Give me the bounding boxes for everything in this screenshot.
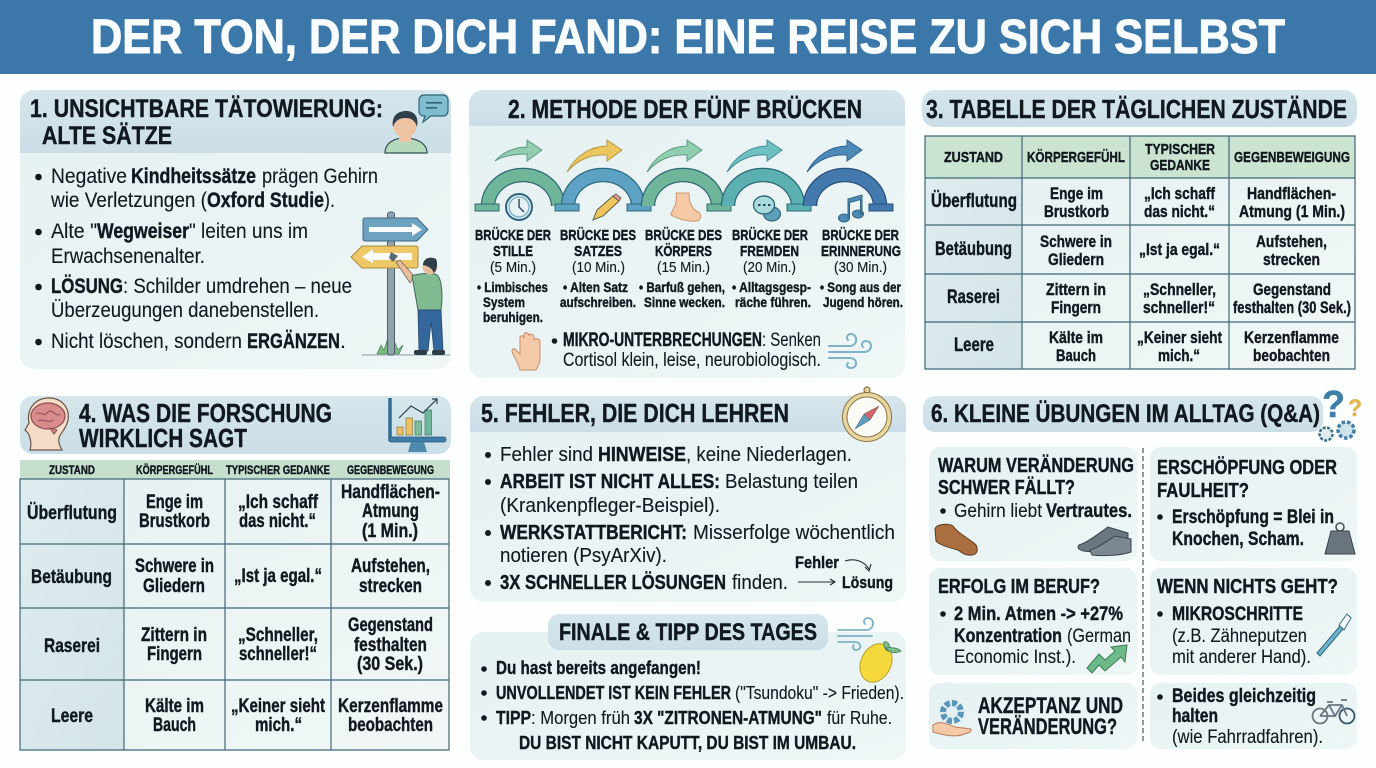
icon: question marks and gears: ? [1322, 384, 1345, 426]
icon: question marks and gears: ? [1348, 395, 1362, 422]
card: wenn nichts geht: MIKROSCHRITTE [1172, 604, 1303, 625]
error to solution diagram [795, 554, 893, 592]
panel 5 bullet list: Misserfolge wöchentlich [693, 521, 895, 544]
bridge descriptions: Sinne wecken. [644, 294, 725, 310]
bridge labels: (5 Min.) [490, 259, 536, 276]
panel 5 bullet list: finden. [732, 571, 788, 594]
table of daily states: Raserei [947, 287, 1000, 308]
card: warum veränderung schwer fällt: Vertrautes. [1046, 501, 1132, 522]
table of daily states: „Ich schaff [1144, 184, 1215, 203]
research table: Raserei [44, 635, 100, 657]
panel 5 bullet list: 3X SCHNELLER LÖSUNGEN [500, 571, 726, 594]
card: erfolg im beruf: 2 Min. Atmen -> +27% [954, 604, 1123, 625]
research table: beobachten [348, 715, 433, 736]
panel 1 bullet list [35, 164, 378, 353]
icon: bicycle [1312, 700, 1354, 724]
panel: finale und tipp des tages [470, 614, 906, 760]
icon: hand holding gear [933, 703, 971, 736]
table of daily states: GEDANKE [1150, 158, 1210, 174]
panel 2 heading: 2. METHODE DER FÜNF BRÜCKEN [508, 94, 862, 124]
panel 1 bullet list: Kindheitssätze [131, 164, 256, 188]
bridge labels: (30 Min.) [834, 259, 887, 276]
panel 5 bullet list: , keine Niederlagen. [686, 443, 852, 466]
icon: rising chart on monitor [389, 398, 446, 452]
icon: person with speech bubble [385, 95, 448, 153]
five arch bridges [475, 175, 893, 211]
panel 5 bullet list: Fehler sind [500, 443, 593, 466]
panel 1 bullet list: Erwachsenenalter. [51, 244, 205, 268]
panel 1 heading: ALTE SÄTZE [42, 122, 172, 150]
panel 4 heading: 4. WAS DIE FORSCHUNG [79, 398, 332, 428]
error to solution diagram: Fehler [795, 554, 840, 572]
panel 4 heading: WIRKLICH SAGT [79, 423, 247, 453]
research table: Gegenstand [348, 615, 433, 636]
bridge descriptions: System [483, 294, 525, 310]
research table: GEGENBEWEGUNG [347, 463, 434, 477]
micro-interruptions note: Cortisol klein, leise, neurobiologisch. [563, 349, 821, 371]
card: erschöpfung oder faulheit: Knochen, Scham. [1172, 529, 1304, 550]
icon: lemon [854, 639, 901, 687]
research table: festhalten [354, 635, 427, 656]
table of daily states: Gliedern [1048, 250, 1104, 269]
finale bullet list: Du hast bereits angefangen! [496, 657, 701, 678]
research table: Atmung [362, 501, 419, 522]
card: akzeptanz und veränderung: AKZEPTANZ UND [978, 693, 1123, 718]
icon: speech bubbles [754, 196, 780, 221]
bridge descriptions: aufschreiben. [560, 294, 636, 310]
card: beides gleichzeitig: halten [1172, 706, 1218, 727]
finale heading [548, 614, 828, 650]
bridge labels: FREMDEN [740, 243, 799, 260]
icon: foot [671, 193, 701, 221]
title banner: DER TON, DER DICH FAND: EINE REISE ZU SICH SELBST [91, 11, 1285, 64]
icon: pencil [593, 194, 621, 220]
finale bullet list: 3X "ZITRONEN-ATMUNG" [634, 707, 822, 728]
panel 1 bullet list: . [340, 329, 346, 353]
icon: hand [512, 333, 540, 370]
card: erfolg im beruf: (German [1067, 626, 1131, 647]
finale bullet list: TIPP [496, 707, 531, 728]
bridge labels: KÖRPERS [655, 243, 712, 260]
micro-interruptions note: MIKRO-UNTERBRECHUNGEN [563, 329, 762, 351]
table of daily states: beobachten [1253, 346, 1330, 365]
panel 1 heading [20, 90, 451, 153]
panel 1 bullet list: ). [324, 188, 335, 212]
card: akzeptanz und veränderung: VERÄNDERUNG? [978, 714, 1117, 739]
table of daily states: strecken [1263, 250, 1320, 269]
bridge labels: BRÜCKE DER [732, 227, 808, 244]
card: warum veränderung schwer fällt: SCHWER FÄLLT? [938, 476, 1075, 499]
progress arrows [495, 140, 862, 172]
table of daily states: „Ist ja egal.“ [1139, 240, 1220, 259]
table of daily states: Betäubung [935, 239, 1012, 260]
card: warum veränderung schwer fällt: WARUM VERÄNDERUNG [938, 454, 1134, 477]
bridge labels: SATZES [574, 243, 622, 260]
table of daily states: Handflächen- [1247, 184, 1336, 203]
table of daily states: Leere [954, 335, 994, 356]
card: erschöpfung oder faulheit: ERSCHÖPFUNG ODER [1157, 456, 1337, 479]
card: erschöpfung oder faulheit: FAULHEIT? [1157, 480, 1249, 502]
table of daily states: Atmung (1 Min.) [1239, 202, 1345, 221]
table of daily states: Aufstehen, [1256, 232, 1327, 251]
card: warum veränderung schwer fällt: Gehirn liebt [954, 501, 1043, 522]
table of daily states: Überflutung [931, 191, 1017, 212]
research table: Kerzenflamme [338, 696, 443, 717]
finale bullet list: : Morgen früh [531, 707, 630, 728]
research table: Aufstehen, [351, 556, 430, 577]
bridge labels: BRÜCKE DER [822, 227, 899, 244]
card: erfolg im beruf: ERFOLG IM BERUF? [938, 576, 1100, 598]
panel 6: kleine übungen im alltag [923, 384, 1362, 749]
panel 5 bullet list [485, 443, 895, 594]
card: beides gleichzeitig: (wie Fahrradfahren). [1172, 727, 1323, 748]
panel 4 heading [20, 396, 451, 454]
table of daily states [925, 136, 1355, 369]
bridge labels: ERINNERUNG [821, 243, 901, 260]
bridge labels: (20 Min.) [743, 259, 796, 276]
panel 1 bullet list: " leiten uns im [189, 219, 308, 243]
research table: Gliedern [143, 576, 205, 597]
panel 4: was die forschung wirklich sagt [20, 396, 451, 750]
icon: gray shoes [1078, 527, 1131, 556]
research table: Bauch [153, 715, 196, 736]
panel 1 bullet list: Überzeugungen danebenstellen. [51, 298, 319, 322]
research table: „Ist ja egal.“ [234, 566, 322, 587]
card: erschöpfung oder faulheit [1150, 447, 1357, 561]
table of daily states: ZUSTAND [944, 150, 1003, 166]
table of daily states: das nicht.“ [1144, 202, 1215, 221]
table of daily states: Kerzenflamme [1244, 328, 1339, 347]
bridge descriptions: • Alten Satz [563, 279, 628, 295]
panel 2: methode der fünf brücken [469, 90, 905, 378]
research table: Leere [51, 705, 93, 727]
icon: signpost with painter [351, 212, 450, 356]
icon: head with brain [25, 398, 68, 450]
panel 5 bullet list: Belastung teilen [725, 470, 858, 493]
bridge descriptions: • Barfuß gehen, [639, 279, 725, 295]
card: erschöpfung oder faulheit: Erschöpfung = Blei in [1172, 507, 1334, 528]
table of daily states: TYPISCHER [1145, 142, 1215, 158]
panel 5 bullet list: WERKSTATTBERICHT: [500, 521, 687, 544]
panel 1 bullet list: prägen Gehirn [262, 164, 378, 188]
research table: Fingern [147, 644, 202, 665]
table of daily states: Zittern in [1046, 280, 1106, 299]
panel 5: fehler, die dich lehren [470, 387, 906, 602]
research table: das nicht.“ [239, 511, 316, 532]
panel 5 bullet list: ARBEIT IST NICHT ALLES: [500, 470, 720, 493]
table of daily states: Kälte im [1049, 328, 1103, 347]
icon: wind [829, 334, 871, 368]
panel 1 bullet list: Alte " [51, 219, 97, 243]
table of daily states: Gegenstand [1253, 280, 1331, 299]
finale heading: FINALE & TIPP DES TAGES [559, 619, 817, 646]
table of daily states: Schwere in [1040, 232, 1112, 251]
bridge labels: STILLE [493, 243, 533, 260]
icon: brown shoe [935, 524, 977, 555]
icon: wind [838, 618, 873, 650]
research table: strecken [359, 576, 422, 597]
title banner [0, 0, 1376, 74]
panel 5 bullet list: notieren (PsyArXiv). [500, 544, 667, 567]
table of daily states: „Schneller, [1143, 280, 1216, 299]
panel 1 heading: 1. UNSICHTBARE TÄTOWIERUNG: [30, 95, 383, 123]
research table: Brustkorb [139, 511, 210, 532]
bridge descriptions: • Song aus der [820, 279, 901, 295]
research table: Schwere in [135, 556, 214, 577]
panel 1 bullet list: wie Verletzungen ( [50, 188, 208, 212]
table of daily states: Fingern [1051, 298, 1101, 317]
error to solution diagram: Lösung [842, 574, 893, 592]
research table: Enge im [146, 492, 203, 513]
panel 5 bullet list: HINWEISE [598, 443, 686, 466]
research table: (1 Min.) [362, 521, 418, 542]
card: wenn nichts geht: (z.B. Zähneputzen [1172, 626, 1307, 647]
icon: weight [1325, 523, 1355, 554]
research table: mich.“ [255, 715, 302, 736]
card: erfolg im beruf: Konzentration [954, 626, 1062, 647]
card: beides gleichzeitig [1150, 683, 1357, 749]
panel 3: tabelle der täglichen zustände [922, 90, 1357, 369]
research table: Kälte im [145, 696, 204, 717]
bridge labels: BRÜCKE DER [475, 227, 551, 244]
table of daily states: Bauch [1056, 346, 1096, 365]
panel 5 bullet list: (Krankenpfleger-Beispiel). [500, 494, 720, 517]
bridge descriptions: Jugend hören. [823, 294, 903, 310]
panel 1 bullet list: : Schilder umdrehen – neue [123, 274, 352, 298]
research table [20, 460, 450, 750]
panel 6 heading [923, 396, 1323, 432]
research table: Überflutung [27, 501, 117, 524]
research table: Betäubung [31, 566, 112, 588]
icon: music notes [838, 195, 864, 222]
card: akzeptanz und veränderung [929, 683, 1137, 749]
table of daily states: „Keiner sieht [1137, 328, 1222, 347]
table of daily states: KÖRPERGEFÜHL [1027, 149, 1125, 166]
table of daily states: mich.“ [1158, 346, 1200, 365]
table of daily states: Brustkorb [1044, 202, 1109, 221]
table of daily states: GEGENBEWEIGUNG [1234, 150, 1350, 166]
research table: „Keiner sieht [231, 696, 326, 717]
bridge descriptions: räche führen. [735, 294, 811, 310]
research table: (30 Sek.) [357, 654, 423, 675]
research table: Handflächen- [341, 482, 440, 503]
table of daily states: schneller!“ [1143, 298, 1215, 317]
micro-interruptions note: : Senken [762, 329, 821, 351]
research table: KÖRPERGEFÜHL [136, 462, 213, 477]
panel 1 bullet list: Negative [51, 164, 127, 188]
card: wenn nichts geht [1150, 568, 1357, 675]
research table: ZUSTAND [49, 463, 95, 477]
research table: „Ich schaff [238, 492, 319, 513]
bridge descriptions: • Limbisches [477, 279, 548, 295]
bridge descriptions: • Alltagsgesp- [732, 279, 811, 295]
icon: clock [506, 194, 532, 220]
table of daily states: Enge im [1050, 184, 1103, 203]
card: erfolg im beruf: Economic Inst.). [954, 647, 1076, 668]
micro-interruptions note [552, 329, 821, 371]
research table: „Schneller, [238, 625, 318, 646]
icon: rising green arrow [1087, 645, 1127, 673]
panel 5 heading: 5. FEHLER, DIE DICH LEHREN [481, 398, 789, 428]
icon: compass [842, 387, 892, 442]
bridge labels: BRÜCKE DES [560, 227, 636, 244]
bridge labels: (10 Min.) [572, 259, 625, 276]
card: warum veränderung schwer fällt [929, 447, 1137, 561]
panel 1 bullet list: Oxford Studie [207, 188, 324, 212]
icon: toothbrush [1317, 614, 1351, 656]
research table: TYPISCHER GEDANKE [226, 463, 330, 477]
finale bullet list: DU BIST NICHT KAPUTT, DU BIST IM UMBAU. [519, 732, 856, 753]
bridge labels [475, 227, 901, 276]
finale bullet list [481, 657, 904, 753]
card: beides gleichzeitig: Beides gleichzeitig [1172, 686, 1316, 707]
card: erfolg im beruf [929, 568, 1137, 675]
panel 1 bullet list: Nicht löschen, sondern [51, 329, 242, 353]
bridge descriptions: beruhigen. [483, 309, 543, 325]
panel 1 bullet list: ERGÄNZEN [247, 329, 340, 353]
panel 1: unsichtbare tätowierung [20, 90, 451, 369]
finale bullet list: UNVOLLENDET IST KEIN FEHLER [496, 682, 731, 703]
bridge labels: BRÜCKE DES [645, 227, 722, 244]
panel 1 bullet list: LÖSUNG [51, 273, 123, 298]
dashed divider [1142, 448, 1144, 743]
card: wenn nichts geht: WENN NICHTS GEHT? [1157, 576, 1338, 598]
bridge labels: (15 Min.) [657, 259, 710, 276]
panel 1 bullet list: Wegweiser [97, 219, 190, 243]
card: wenn nichts geht: mit anderer Hand). [1172, 647, 1311, 668]
research table: Zittern in [141, 625, 207, 646]
research table: schneller!“ [239, 644, 317, 665]
bridge descriptions [477, 279, 903, 325]
icon: question marks and gears [1320, 384, 1362, 440]
finale bullet list: für Ruhe. [827, 707, 892, 728]
finale bullet list: ("Tsundoku" -> Frieden). [735, 682, 904, 703]
